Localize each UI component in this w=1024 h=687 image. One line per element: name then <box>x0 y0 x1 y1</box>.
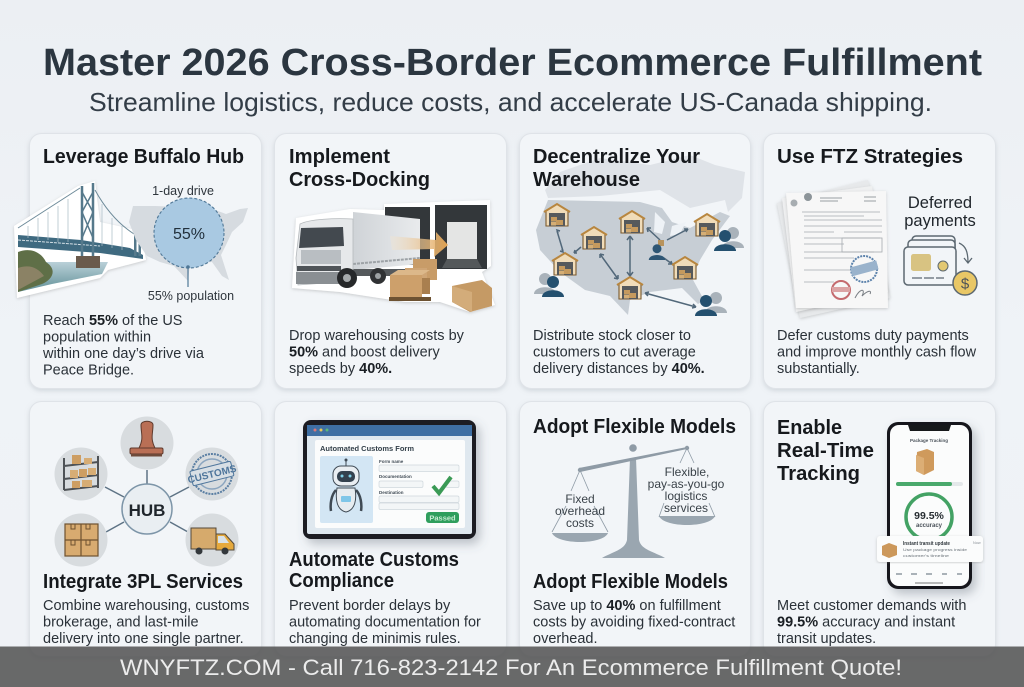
icon: warehouse shelves <box>64 455 98 490</box>
panel: Use FTZ Strategies <box>764 134 996 388</box>
heading: Decentralize Your Warehouse: Decentralize Your <box>533 146 700 168</box>
heading: Enable Real-Time Tracking: Tracking <box>777 463 860 485</box>
text: tracking description <box>777 598 966 647</box>
icon: customs stamp <box>186 454 238 494</box>
chart: balance scale: logistics <box>665 489 707 503</box>
text: tracking description: transit updates. <box>777 631 876 647</box>
panel: Leverage Buffalo Hub <box>14 134 262 388</box>
panel: Implement Cross-Docking <box>274 134 506 388</box>
heading: Automate Customs Compliance: Compliance <box>289 570 394 592</box>
text: 3PL description: delivery into one single partner. <box>43 631 244 647</box>
panel: Adopt Flexible Models <box>520 402 750 656</box>
heading: Decentralize Your Warehouse <box>533 146 700 191</box>
chart: balance scale: pay-as-you-go <box>648 477 725 491</box>
chart: balance scale: Flexible, <box>665 465 709 479</box>
icon: tablet with automated customs form: Documentation <box>379 474 412 479</box>
heading: Integrate 3PL Services: Integrate 3PL Services <box>43 571 243 593</box>
text: flexible models description: costs by avoiding fixed-contract <box>533 614 735 630</box>
title: Master 2026 Cross-Border Ecommerce Fulfillment <box>43 42 982 84</box>
text: cross-docking description: Drop warehousing costs by <box>289 328 465 344</box>
text: customs compliance description <box>289 598 481 647</box>
text: cross-docking description: speeds by 40%. <box>289 361 392 377</box>
icon: tablet with automated customs form: Destination <box>379 490 404 495</box>
callout: instant transit update: Instant transit update <box>903 541 950 547</box>
icon: customs documents <box>777 180 890 318</box>
text: Buffalo hub description: Peace Bridge. <box>43 362 134 378</box>
icon: stacked boxes <box>65 524 98 556</box>
icon: phone with package tracking: accuracy <box>916 523 943 529</box>
callout: instant transit update: customer's timeline <box>903 553 950 558</box>
chart: US map with 55% reach circle: 55% <box>173 226 205 243</box>
icon: Peace Bridge <box>14 181 146 298</box>
text: customs compliance description: Prevent border delays by <box>289 598 451 614</box>
text: Buffalo hub description: 55% of the US <box>89 313 182 329</box>
footer banner: WNYFTZ.COM - Call 716-823-2142 For An Ecommerce Fulfillment Quote! <box>120 655 902 680</box>
icon: tablet with automated customs form: Automated Customs Form <box>320 444 414 453</box>
chart: balance scale: services <box>664 501 708 515</box>
chart: US map with 55% reach circle: 55% population <box>148 289 234 303</box>
subtitle: Streamline logistics, reduce costs, and accelerate US-Canada shipping. <box>89 87 932 117</box>
text: flexible models description: overhead. <box>533 631 598 647</box>
text: cross-docking description: 50% and boost delivery <box>289 344 440 360</box>
text: tracking description: Meet customer demands with <box>777 598 966 614</box>
text: 3PL description: brokerage, and last-mile <box>43 614 199 630</box>
heading: Automate Customs Compliance: Automate Customs <box>289 549 459 571</box>
heading: Automate Customs Compliance <box>289 549 459 592</box>
chart: North America map <box>536 155 745 315</box>
panel: Enable Real-Time Tracking <box>764 402 996 656</box>
footer banner <box>0 646 1024 687</box>
icon: warehouses, arrows and customers <box>534 204 744 316</box>
chart: balance scale: Fixed <box>565 492 595 506</box>
text: Buffalo hub description: population within <box>43 330 151 346</box>
callout: instant transit update: Use package progress inside <box>903 547 968 552</box>
text: decentralize description: Distribute stock closer to <box>533 328 691 344</box>
chart: US map with 55% reach circle: 1-day drive <box>152 184 214 198</box>
node: hub <box>122 484 172 534</box>
chart: balance scale: overhead <box>555 504 605 518</box>
icon: truck at loading docks <box>292 200 495 312</box>
text: deferred payments label: payments <box>904 212 976 230</box>
heading: Enable Real-Time Tracking: Enable <box>777 417 842 439</box>
heading: Implement Cross-Docking: Cross-Docking <box>289 169 430 191</box>
text: decentralize description: customers to cut average <box>533 344 696 360</box>
text: FTZ description: Defer customs duty payments <box>777 328 969 344</box>
icon: rubber stamp <box>130 421 163 456</box>
icon: phone with package tracking: 99.5% <box>914 510 945 522</box>
text: cross-docking description <box>289 328 465 377</box>
heading: Enable Real-Time Tracking <box>777 417 874 485</box>
text: Buffalo hub description: within one day’s drive via <box>42 346 205 362</box>
text: deferred payments label: Deferred <box>908 194 972 212</box>
panel: Automate Customs Compliance <box>274 402 506 656</box>
chart: US map with 55% reach circle <box>129 184 248 303</box>
icon: phone with package tracking: Package Tracking <box>910 438 948 443</box>
text: customs compliance description: automating documentation for <box>289 614 481 630</box>
icon: customs stamp: CUSTOMS <box>187 464 238 486</box>
text: customs compliance description: changing de minimis rules. <box>289 631 461 647</box>
icon: payment cards and coin <box>904 236 977 295</box>
text: Buffalo hub description <box>42 313 205 378</box>
callout: instant transit update <box>877 536 983 562</box>
panel: Decentralize Your Warehouse <box>520 134 750 388</box>
chart: 3PL hub diagram <box>54 416 238 566</box>
text: 3PL description: Combine warehousing, customs <box>43 598 249 614</box>
heading: Use FTZ Strategies: Use FTZ Strategies <box>777 146 963 168</box>
text: decentralize description <box>533 328 705 377</box>
text: FTZ description: and improve monthly cash flow <box>777 344 977 360</box>
text: FTZ description <box>777 328 977 377</box>
heading: Enable Real-Time Tracking: Real-Time <box>777 440 874 462</box>
icon: tablet with automated customs form <box>303 420 476 539</box>
heading: Leverage Buffalo Hub: Leverage Buffalo Hub <box>43 146 244 168</box>
icon: phone with package tracking <box>877 422 983 589</box>
text: decentralize description: delivery distances by 40%. <box>533 361 705 377</box>
chart: balance scale: costs <box>566 516 594 530</box>
callout: instant transit update: Now <box>973 541 981 545</box>
heading: Adopt Flexible Models (lower): Adopt Flexible Models <box>533 571 728 593</box>
text: FTZ description: substantially. <box>777 361 860 377</box>
text: flexible models description <box>533 598 735 647</box>
panel: Integrate 3PL Services <box>30 402 262 656</box>
icon: robot <box>331 458 361 512</box>
icon: delivery truck <box>191 528 234 554</box>
icon: tablet with automated customs form: Form name <box>379 459 404 464</box>
heading: Adopt Flexible Models: Adopt Flexible Models <box>533 416 736 438</box>
heading: Implement Cross-Docking: Implement <box>289 146 390 168</box>
chart: balance scale <box>552 444 725 558</box>
text: flexible models description: Save up to 40% on fulfillment <box>533 598 721 614</box>
text: tracking description: 99.5% accuracy and instant <box>777 614 955 630</box>
icon: payment cards and coin: $ <box>961 276 970 292</box>
text: deferred payments label <box>904 194 976 230</box>
heading: Implement Cross-Docking <box>289 146 430 191</box>
text: 3PL description <box>43 598 249 647</box>
node: hub: HUB <box>129 501 165 520</box>
text: Buffalo hub description: Reach <box>43 313 89 329</box>
icon: tablet with automated customs form: Passed <box>429 514 456 522</box>
heading: Decentralize Your Warehouse: Warehouse <box>533 169 640 191</box>
